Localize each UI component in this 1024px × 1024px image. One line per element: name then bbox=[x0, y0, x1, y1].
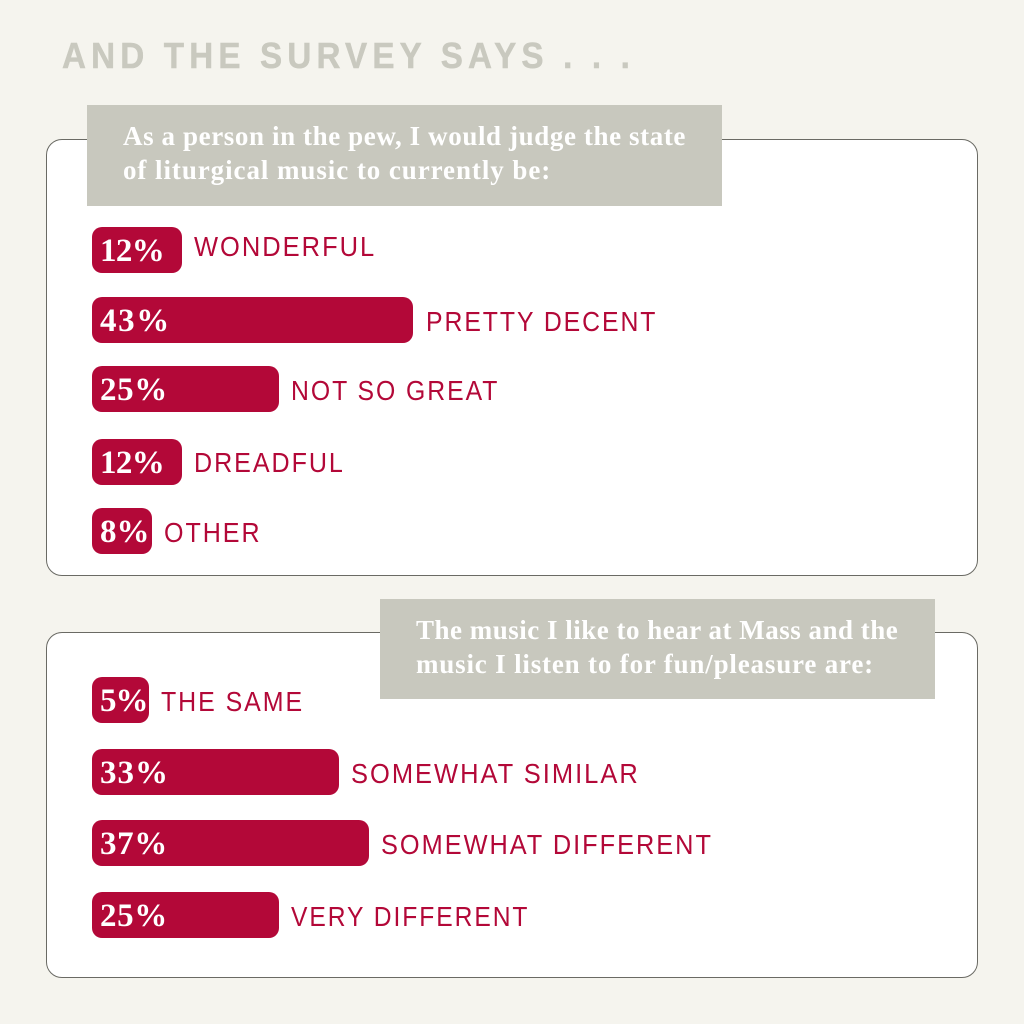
bar: 25% not so great: 25% bbox=[100, 372, 168, 408]
bar: 12% dreadful bbox=[92, 439, 182, 485]
bar: 5% the same: 5% bbox=[100, 683, 148, 719]
bar: 12% wonderful: 12% bbox=[100, 233, 164, 269]
heading: state of liturgical music: of liturgical music to currently be: bbox=[123, 155, 551, 185]
bar: 43% pretty decent bbox=[92, 297, 413, 343]
panel: music preference bbox=[46, 632, 978, 978]
label: dreadful: DREADFUL bbox=[194, 447, 345, 478]
label: pretty decent: PRETTY DECENT bbox=[426, 306, 657, 337]
heading: state of liturgical music: As a person in the pew, I would judge the state bbox=[123, 121, 686, 151]
bar: 12% wonderful bbox=[92, 227, 182, 273]
bar: 12% dreadful: 12% bbox=[100, 445, 164, 481]
bar: 33% somewhat similar bbox=[92, 749, 339, 795]
bar: 25% very different bbox=[92, 892, 279, 938]
bar: 33% somewhat similar: 33% bbox=[100, 755, 169, 791]
bar: 8% other bbox=[92, 508, 152, 554]
panel: state of liturgical music bbox=[46, 139, 978, 576]
title: AND THE SURVEY SAYS . . . bbox=[62, 35, 635, 76]
label: not so great: NOT SO GREAT bbox=[291, 375, 499, 406]
bar: 5% the same bbox=[92, 677, 149, 723]
label: other: OTHER bbox=[164, 517, 262, 548]
label: very different: VERY DIFFERENT bbox=[291, 901, 529, 932]
bar: 25% very different: 25% bbox=[100, 898, 168, 934]
heading: state of liturgical music bbox=[87, 105, 722, 206]
heading: music preference: music I listen to for fun/pleasure are: bbox=[416, 649, 874, 679]
bar: 8% other: 8% bbox=[100, 514, 150, 550]
bar: 37% somewhat different bbox=[92, 820, 369, 866]
heading: music preference: The music I like to hear at Mass and the bbox=[416, 615, 898, 645]
bar: 43% pretty decent: 43% bbox=[100, 303, 171, 339]
bar: 37% somewhat different: 37% bbox=[100, 826, 168, 862]
label: somewhat similar: SOMEWHAT SIMILAR bbox=[351, 758, 640, 789]
heading: music preference bbox=[380, 599, 935, 699]
label: wonderful: WONDERFUL bbox=[194, 231, 376, 262]
label: the same: THE SAME bbox=[161, 686, 304, 717]
bar: 25% not so great bbox=[92, 366, 279, 412]
label: somewhat different: SOMEWHAT DIFFERENT bbox=[381, 829, 713, 860]
